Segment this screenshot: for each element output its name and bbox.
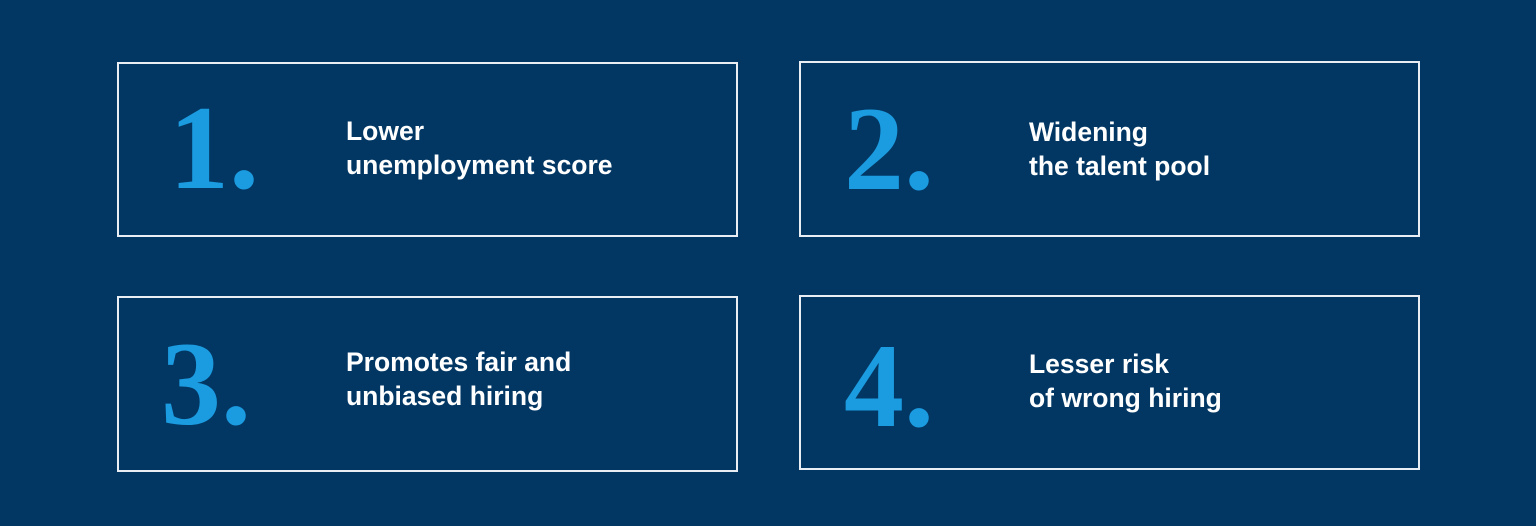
text 3 <box>346 347 571 411</box>
text 2: Widening <box>1029 117 1148 147</box>
text 1: unemployment score <box>346 150 613 180</box>
text 4: Lesser risk <box>1029 349 1169 379</box>
number 4: 4. <box>844 319 934 452</box>
number 1: 1. <box>169 81 259 214</box>
text 3: unbiased hiring <box>346 381 543 411</box>
text 3: Promotes fair and <box>346 347 571 377</box>
text 1: Lower <box>346 116 424 146</box>
text 2 <box>1029 117 1210 181</box>
text 4: of wrong hiring <box>1029 383 1222 413</box>
panel: item 2 <box>799 61 1420 237</box>
panel: item 1 <box>117 62 738 237</box>
panel: item 3 <box>117 296 738 472</box>
text 2: the talent pool <box>1029 151 1210 181</box>
text 1 <box>346 116 613 180</box>
number 3: 3. <box>161 317 251 450</box>
panel: item 4 <box>799 295 1420 470</box>
number 2: 2. <box>844 82 934 215</box>
text 4 <box>1029 349 1222 413</box>
